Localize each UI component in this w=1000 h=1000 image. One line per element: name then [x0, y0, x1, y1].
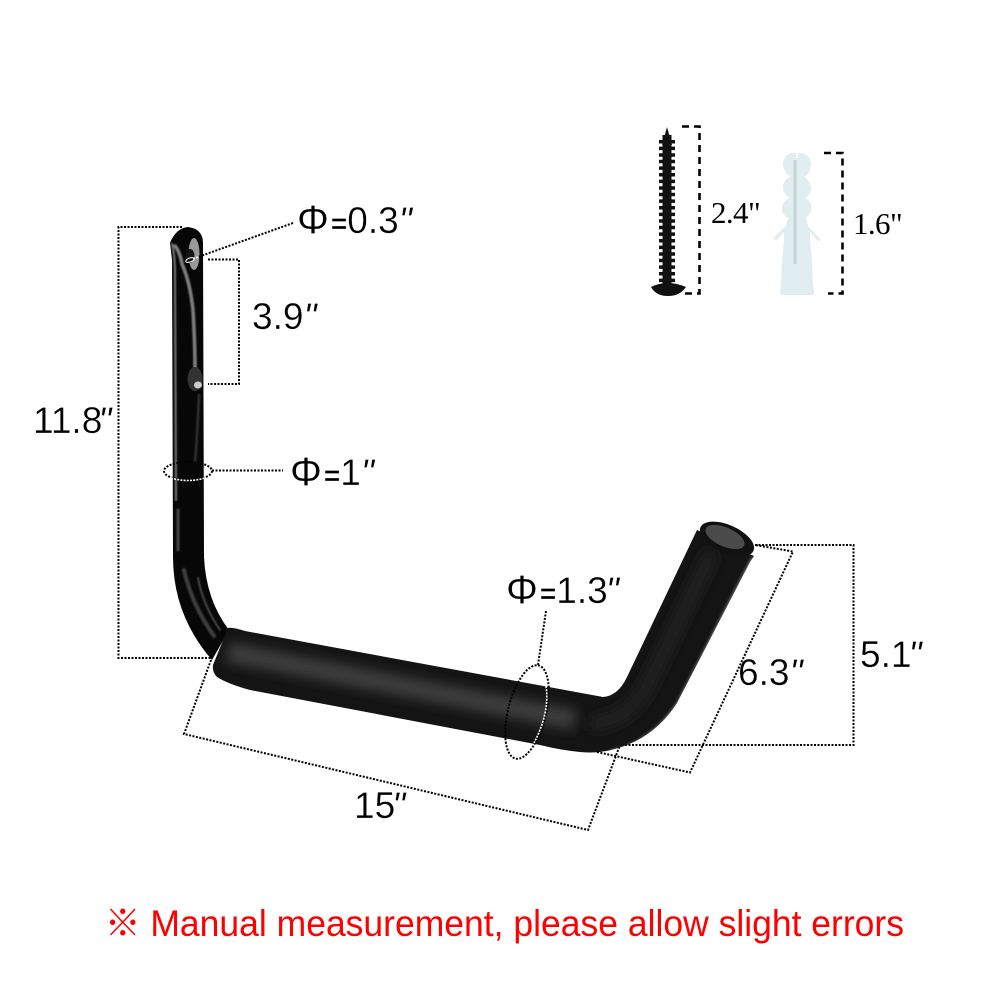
dimension: foam diameter 1.3 inch: Φ=1.3" [506, 568, 621, 612]
dimension: 6.3 inch arm: 6.3" [738, 652, 804, 693]
upper mounting hole [188, 238, 200, 270]
foam grip and angled arm [213, 530, 754, 752]
dimension: hole diameter 0.3 inch [185, 198, 414, 263]
end cap [695, 514, 759, 564]
dimension: tube diameter 1 inch: Φ=1" [290, 450, 376, 494]
dimension: 3.9 inch hole spacing [208, 260, 318, 384]
screw length dimension: 2.4" [711, 195, 760, 230]
dimension: 11.8 inch height [33, 227, 212, 658]
hook photo [170, 227, 759, 752]
lower mounting hole [188, 367, 202, 391]
screw length dimension [682, 126, 760, 294]
dimension: hole diameter 0.3 inch: Φ=0.3" [297, 198, 414, 242]
gloss highlights on upright [172, 244, 220, 636]
dimension: foam diameter 1.3 inch [497, 568, 621, 763]
dimension: 11.8 inch height: 11.8" [33, 400, 113, 441]
dimension: 6.3 inch arm [597, 545, 804, 772]
soft shading on grip [228, 552, 753, 752]
glossy steel upright [170, 227, 229, 660]
dimension: 3.9 inch hole spacing: 3.9" [252, 296, 318, 337]
dimension: 15 inch length [184, 660, 620, 830]
anchor length dimension [824, 153, 902, 294]
dimension: 15 inch length: 15" [354, 785, 407, 826]
anchor length dimension: 1.6" [853, 206, 902, 241]
disclaimer note: ※ Manual measurement, please allow slight errors [105, 903, 904, 944]
dimension: 5.1 inch rise [620, 545, 923, 745]
dimension: tube diameter 1 inch [164, 450, 376, 494]
screw [651, 127, 686, 296]
dimension: 5.1 inch rise: 5.1" [860, 634, 923, 675]
wall anchor [773, 152, 821, 295]
